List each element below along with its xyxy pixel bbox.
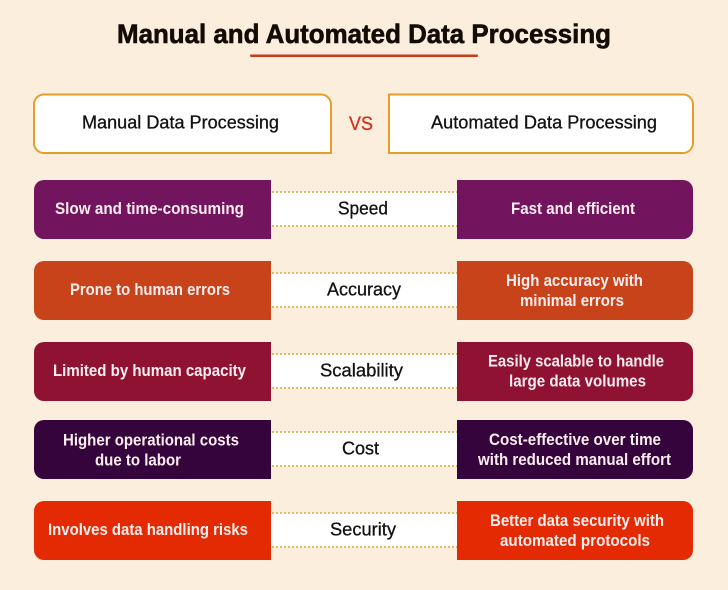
- cost: automated: [457, 420, 693, 479]
- row: accuracy: [34, 261, 693, 320]
- cost: manual: due to labor: [95, 452, 182, 470]
- row: cost: [34, 420, 693, 479]
- security: automated: [457, 501, 693, 560]
- row: speed: [34, 180, 693, 239]
- speed: automated: [457, 180, 693, 239]
- row: scalability: [34, 342, 693, 401]
- accuracy: automated: [457, 261, 693, 320]
- title underline: [250, 54, 478, 57]
- speed: manual: Slow and time-consuming: [55, 200, 244, 218]
- cost: automated: with reduced manual effort: [477, 451, 671, 469]
- cost: criterion: [271, 432, 457, 466]
- security: automated: Better data security with: [490, 512, 664, 530]
- speed: automated: Fast and efficient: [511, 200, 635, 218]
- title: Manual and Automated Data Processing: [117, 19, 611, 49]
- cost: automated: Cost-effective over time: [489, 431, 661, 449]
- scalability: criterion: [271, 354, 457, 388]
- header: automated data processing: Automated Data Processing: [431, 112, 657, 132]
- scalability: automated: large data volumes: [509, 372, 646, 390]
- header: automated data processing: [389, 94, 693, 153]
- accuracy: manual: [34, 261, 271, 320]
- scalability: manual: Limited by human capacity: [53, 362, 247, 380]
- speed: criterion: [271, 192, 457, 226]
- vs label: VS: [349, 114, 373, 135]
- scalability: automated: [457, 342, 693, 401]
- accuracy: criterion: Accuracy: [327, 278, 402, 300]
- accuracy: criterion: [271, 273, 457, 307]
- accuracy: automated: High accuracy with: [506, 272, 643, 290]
- security: manual: [34, 501, 271, 560]
- cost: criterion: Cost: [342, 438, 379, 458]
- scalability: criterion: Scalability: [320, 360, 404, 380]
- security: criterion: Security: [330, 518, 397, 540]
- accuracy: manual: Prone to human errors: [70, 281, 230, 299]
- header: manual data processing: Manual Data Processing: [82, 112, 279, 132]
- accuracy: automated: minimal errors: [520, 292, 624, 310]
- speed: criterion: Speed: [338, 198, 388, 218]
- scalability: manual: [34, 342, 271, 401]
- header: manual data processing: [34, 94, 331, 153]
- scalability: automated: Easily scalable to handle: [488, 352, 664, 370]
- security: automated: automated protocols: [500, 532, 650, 550]
- cost: manual: Higher operational costs: [63, 432, 239, 450]
- speed: manual: [34, 180, 271, 239]
- security: manual: Involves data handling risks: [48, 521, 248, 539]
- security: criterion: [271, 513, 457, 547]
- row: security: [34, 501, 693, 560]
- cost: manual: [34, 420, 271, 479]
